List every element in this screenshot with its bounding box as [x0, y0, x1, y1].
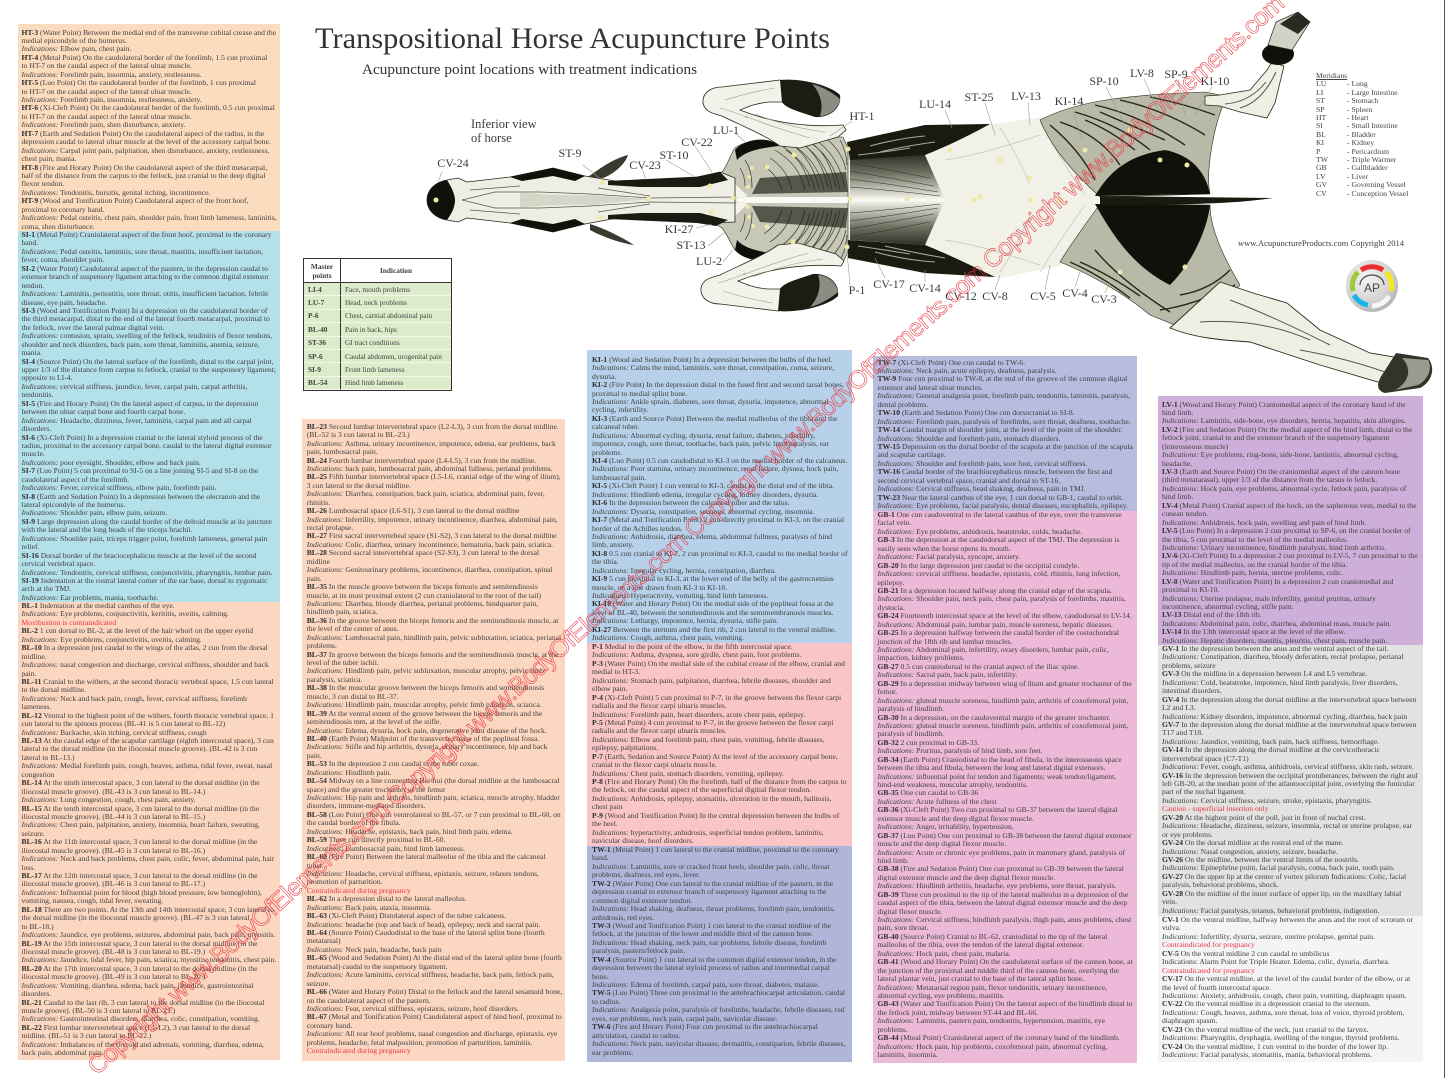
panel: bladder meridian BL part 1: BL-1 Indentation at the medial canthus of the eye. Indications: Eye problems, conjunctivitis, kerititis, uveitis, calming. Moxibustion is contraindicated BL-2 1 cun dorsal to BL-2, at the level of the hair whorl on the upper eyelid Indications: Eye problems, conjunctivitis, uveitis, calming. BL-10 In a depression just caudal to the wings of the atlas, 2 cun from the dorsal midline. Indications: nasal congestion and discharge, cervical stiffness, shoulder and back pain. BL-11 Cranial to the withers, at the second thoracic vertebral space, 1.5 cun lateral to the dorsal midline. Indications: Neck and back pain, cough, fever, cervical stiffness, forelimb lameness. BL-12 Ventral to the highest point of the withers, fourth thoracic vertebral space, 1 cun lateral to the spinous process (BL-41 is 5 cun lateral to BL-12) Indications: Backache, skin itching, cervical stiffness, cough BL-13 At the caudal edge of the scapular cartilage (eighth intercostal space), 3 cun lateral to the dorsal midline (in the iliocostal muscle groove). (BL-42 is 3 cun lateral to BL-13.) Indications: Medial forelimb pain, cough, heaves, asthma, tidal fever, sweat, nasal congestion BL-14 At the ninth intercostal space, 3 cun lateral to the dorsal midline (in the iliocostal muscle groove). (BL-43 is 3 cun lateral to BL-14.) Indications: Lung congestion, cough, chest pain, anxiety. BL-15 At the tenth intercostal space, 3 cun lateral to the dorsal midline (in the iliocostal muscle groove). (BL-44 is 3 cun lateral to BL-15.) Indications: Chest pain, palpitation, anxiety, insomnia, heart failure, sweating, seizure. BL-16 At the 11th intercostal space, 3 cun lateral to the dorsal midline (in the iliocostal muscle groove). (BL-45 is 3 cun lateral to BL-16.) Indications: Neck and back problems, chest pain, colic, fever, abdominal pain, hair loss. BL-17 At the 12th intercostal space, 3 cun lateral to the dorsal midline (in the iliocostal muscle groove). (BL-46 is 3 cun lateral to BL-17.) Indications: Influential point for blood (high blood pressure, low hemoglobin), vomiting, nausea, cough, tidal fever, sweating. BL-18 There are two points. At the 13th and 14th intercostal space, 3 cun lateral to the dorsal midline (in the iliocostal muscle groove). (BL-47 is 3 cun lateral to BL-18.) Indications: Jaundice, eye problems, seizures, abdominal pain, back pain, myositis. BL-19 At the 15th intercostal space, 3 cun lateral to the dorsal midline (in the iliocostal muscle groove). (BL-48 is 3 cun lateral to BL-19.) Indications: Jaundice, tidal fever, hip pain, sciatica, myositis, tendonitis, chest pain. BL-20 At the 17th intercostal space, 3 cun lateral to the dorsal midline (in the iliocostal muscle groove). (BL-49 is 3 cun lateral to BL-20.) Indications: Vomiting, diarrhea, edema, back pain, jaundice, gastrointestinal disorders. BL-21 Caudal to the last rib, 3 cun lateral to the dorsal midline (in the iliocostal muscle groove). (BL-50 is 3 cun lateral to BL-21.) Indications: Gastrointestinal disorders, diarrhea, colic, constipation, vomiting. BL-22 First lumbar intervertebral space (L1-L2), 3 cun lateral to the dorsal midline. (BL-51 is 3 cun lateral to BL-22.) Indications: Imbalances of the thyroid and adrenals, vomiting, diarrhea, edema, back pain, abdominal pain.: [22, 601, 276, 1057]
table: master points: Face, mouth problems: [345, 285, 410, 294]
panel: bladder meridian BL part 2: BL-23 Second lumbar intervertebral space (L2-L3), 3 cun from the dorsal midline. (BL-52 is 3 cun lateral to BL-23.) Indications: Asthma, urinary incontinence, impotence, edema, ear problems, back pain, lumbosacral pain. BL-24 Fourth lumbar intervertebral space (L4-L5), 3 cun from the midline. Indications: back pain, lumbosacral pain, abdominal fullness, perianal problems. BL-25 Fifth lumbar intervertebral space (L5-L6, cranial edge of the wing of ilium), 3 cun lateral to the dorsal midline. Indications: Diarrhea, constipation, back pain, sciatica, abdominal pain, fever, rhinitis. BL-26 Lumbosacral space (L6-S1), 3 cun lateral to the dorsal midline Indications: Infertility, impotence, urinary incontinence, diarrhea, abdominal pain, rectal prolapse. BL-27 First sacral intervertebeal space (S1-S2), 3 cun lateral to the dorsal midline Indications: Colic, diarrhea, urinary incontinence, hematuria, back pain, sciatica. BL-28 Second sacral intervertebral space (S2-S3), 3 cun lateral to the dorsal midline Indications: Genitourinary problems, incontinence, diarrhea, constipation, spinal pain. BL-35 In the muscle groove between the biceps femoris and semitendinosis muscle, at its most proximal extent (2 cun craniolateral to the root of the tail) Indications: Diarrhea, bloody diarrhea, perianal problems, hindquarter pain, hindlimb pain, sciatica. BL-36 In the groove between the biceps femoris and the semitendinosis muscle, at the level of the center of anus. Indications: Lumbosacral pain, hindlimb pain, pelvic subluxation, sciatica, perianal problems. BL-37 In groove between the biceps femoris and the semitendinosis muscle, at the level of the tuber ischii. Indications: Hindlimb pain, pelvic subluxation, muscular atrophy, pelvic limb paralysis, sciatica. BL-38 In the muscular groove between the biceps femoris and semitendinosis muscle, 3 cun distal to BL-37. Indications: Hindlimb pain, muscular atrophy, pelvic limb paralysis, sciatica. BL-39 At the ventral extent of the groove between the biceps femoris and the semitendinosis mm, at the level of the stifle. Indications: Edema, dysuria, hock pain, degenerative joint disease of the hock. BL-40 (Earth Point) Midpoint of the transverse crease of the popliteal fossa. Indications: Stifle and hip arthritis, dysuria, urinary incontinence, hip and back pain. BL-53 In the depression 2 cun caudal to the tuber coxae. Indications: Hindlimb pain. BL-54 Midway on a line connecting Bai-hui (the dorsal midline at the lumbosacral space) and the greater trochanter of the femur Indications: Hip pain and arthritis, hindlimb pain, sciatica, muscle atrophy, bladder disorders, immune-mediated disorders. BL-58 (Luo Point) One cun ventrolateral to BL-57, or 7 cun proximal to BL-60, on the caudal border of the fibula. Indications: Headache, epistaxis, back pain, hind limb pain, edema. BL-59 Three cun directly proximal to BL-60. Indications: Lumbosacral pain, hind limb lameness. BL-60 (Fire Point) Between the lateral malleolus of the tibia and the calcaneal tuber. Indications: Headache, cervical stiffness, epistaxis, seizure, relaxes tendons, promotion of parturition. Contraindicated during pregnancy BL-62 In a depression distal to the lateral malleolus. Indications: Back pain, ataxia, insomnia. BL-63 (Xi-Cleft Point) Distolateral aspect of the tuber calcaneus. Indications: headache (top and back of head), epilepsy, neck and sacral pain. BL-64 (Source Point) Caudodistal to the base of the lateral splint bone (fourth metatarsal) Indications: Neck pain, headache, back pain BL-65 (Wood and Sedation Point) At the distal end of the lateral splint bone (fourth metatarsal) caudal to the suspensory ligament. Indications: Acute laminitis, cervical stiffness, headache, back pain, fetlock pain, seizure. BL-66 (Water and Horary Point) Distal to the fetlock and the lateral sesamoid bone, on the caudolateral aspect of the pastern. Indications: Fear, cervical stiffness, epistaxis, seizure, hoof disorders. BL-67 (Metal and Tonific: [307, 422, 562, 1055]
point labels: LU-1: [713, 123, 739, 137]
icon: logo: AP: [1364, 281, 1380, 295]
point labels: [437, 66, 1229, 306]
table: master points: ST-36: [308, 338, 326, 347]
legend: meridians: ST: [1316, 96, 1325, 105]
icon: head and neck: [427, 155, 735, 245]
panel: conception vessel CV: CV-1 On the ventral midline, halfway between the anus and the root of scrotum or vulva. Indications: Infertility, dysuria, seizure, uterine prolapse, genital pain. Contraindicated for pregnancy CV-5 On the ventral midline 2 cun caudal to umbilicus Indications: Alarm Point for Triple Heater. Edema, colic, dysuria, diarrhea. Contraindicated for pregnancy CV-17 On the ventral midline, at the level of the caudal border of the elbow, or at the level of fourth intercostal space. Indications: Anxiety, anhidrosis, cough, chest pain, vomiting, diaphragm spasm. CV-22 On the ventral midline in a depression cranial to the sternum. Indications: Cough, heaves, asthma, sore throat, loss of voice, thyroid problem, diaphragm spasm. CV-23 On the ventral midline of the neck, just cranial to the larynx. Indications: Pharyngitis, dysphagia, swelling of the tongue, thyroid problems. CV-24 On the ventral midline, 1 cun ventral to the border of the lower lip. Indications: Facial paralysis, stomatitis, mania, behavioral problems.: [1162, 915, 1413, 1059]
icon: hind limb upper: [1040, 12, 1310, 197]
point labels: ST-9: [559, 146, 581, 160]
panel: triple warmer meridian TW part 1: TW-1 (Metal Point) 1 cun lateral to the cranial midline, proximal to the coronary band. Indications: Laminitis, sore or cracked front heels, shoulder pain, colic, throat problems, deafness, red eyes, fever. TW-2 (Water Point) One cun lateral to the cranial midline of the pastern, in the depression cranial to extensor branch of suspensory ligament attaching to the common digital extensor tendon. Indications: Head shaking, deafness, throat problems, forelimb pain, tendonitis, anhidrosis, red eyes. TW-3 (Wood and Tonification Point) 1 cun lateral to the cranial midline of the fetlock, at the junction of the lower and middle third of the cannon bone. Indications: Head shaking, neck pain, ear problems, febrile disease, forelimb paralysis, pastern/fetlock pain. TW-4 (Source Point) 1 cun lateral to the common digital extensor tendon, in the depression between the lateral styloid process of radius and intermedial carpal bone. Indications: Edema of forelimb, carpal pain, sore throat, diabetes, malaise. TW-5 (Luo Point) Three cun proximal to the antebrachiocarpal articulation, caudal to radius. Indications: Analgesia point, paralysis of forelimbs, headache, febrile diseases, red eyes, ear problems, neck pain, carpal pain, navicular disease. TW-6 (Fire and Horary Point) Four cun proximal to the antebrachiocarpal articulation, caudal to radius. Indications: Neck pain, navicular disease, dermatitis, constipation, febrile diseases, ear problems.: [592, 845, 845, 1056]
table: master points: Caudal abdomen, urogenital pain: [345, 352, 442, 361]
point labels: CV-24: [437, 156, 469, 170]
table: master points: [304, 259, 451, 390]
leader lines: [438, 79, 1212, 293]
point labels: CV-3: [1091, 292, 1117, 306]
panel: triple warmer meridian TW part 2: TW-7 (Xi-Cleft Point) One cun caudal to TW-6. Indications: Neck pain, acute epilepsy, deafness, paralysis. TW-9 Four cun proximal to TW-8, at the end of the groove of the common digital extensor and lateral ulnar muscles. Indications: General analgesia point, forelimb pain, tendonitis, laminitis, paralysis, dental problems. TW-10 (Earth and Sedation Point) One cun dorsocranial to SI-8. Indications: Forelimb pain, paralysis of forelimbs, sore throat, deafness, toothache. TW-14 Caudal margin of shoulder joint, at the level of the point of the shoulder. Indications: Shoulder and forelimb pain, stomach disorders. TW-15 Depression on the dorsal border of the scapula at the junction of the scapula and scapular cartilage. Indications: Shoulder and forelimb pain, sore foot, cervical stiffness. TW-16 Caudal border of the brachiocephalicus muscle, between the first and second cervical vertebral space, cranial and dorsal to ST-16. Indications: Cervical stiffness, head shaking, deafness, pain in TMJ. TW-23 Near the lateral canthus of the eye, 1 cun dorsal to GB-1, caudal to orbit. Indications: Eye problems, facial paralysis, dental diseases, encephalitis, epilepsy.: [878, 358, 1133, 510]
panel: gallbladder meridian GB: GB-1 One cun caudoventral to the lateral canthus of the eye, over the transverse facial vein. Indications: Eye problems, anhidrosis, heatstroke, colds, headache. GB-3 In the depression at the caudodorsal aspect of the TMJ. The depression is easily seen when the horse opens its mouth. Indications: Facial paralysis, syncope, anxiety. GB-20 In the large depression just caudal to the occipital condyle. Indications: cervical stiffness, headache, epistaxis, cold, rhinitis, lung infection, epilepsy. GB-21 In a depression located halfway along the cranial edge of the scapula. Indications: Shoulder pain, neck pain, chest pain, paralysis of forelimbs, mastitis, dystocia. GB-24 Fourteenth intercostal space at the level of the elbow, caudodorsal to LV-14. Indications: Abdominal pain, lumbar pain, muscle soreness, hepatic diseases. GB-25 In a depression halfway between the caudal border of the costochondral junction of the 18th rib and lumbar muscles. Indications: Abdominal pain, infertility, ovary disorders, lumbar pain, colic, impaction, kidney problems. GB-27 0.5 cun craniodorsal to the cranial aspect of the iliac spine. Indications: Sacral pain, back pain, infertility. GB-29 In a depression midway between wing of ilium and greater trochanter of the femur. Indications: gluteal muscle soreness, hindlimb pain, arthritis of coxofemoral joint, paralysis of hindlimb. GB-30 In a depression, on the caudoventral margin of the greater trochanter. Indications: gluteal muscle soreness, hindlimb pain, arthritis of coxofemoral joint, paralysis of hindlimb. GB-32 2 cun proximal to GB-33. Indications: Pruritus, paralysis of hind limb, sore feet. GB-34 (Earth Point) Craniodistal to the head of fibula, in the interosseous space between the tibia and fibula, between the long and lateral digital extensors. Indications: influential point for tendon and ligaments; weak tendon/ligament, hind-end weakness, muscular atrophy, tendonitis. GB-35 One cun caudal to GB-36 Indications: Acute fullness of the chest GB-36 (Xi-Cleft Point) Two cun proximal to GB-37 between the lateral digital extensor muscle and the deep digital flexor muscle. Indications: Anger, irritability, hypertension. GB-37 (Luo Point) One cun proximal to GB-38 between the lateral digital extensor muscle and the deep digital flexor muscle. Indications: Acute or chronic eye problems, pain in mammary gland, paralysis of hind limb. GB-38 (Fire and Sedation Point) One cun proximal to GB-39 between the lateral digital extensor muscle and the deep digital flexor muscle. Indications: Hindlimb arthritis, headache, eye problems, sore throat, paralysis. GB-39 Three cun proximal to the tip of the lateral malleolus in a depression of the caudal aspect of the tibia, between the lateral digital extensor muscle and the deep digital flexor muscle. Indications: Cervical stiffness, hindlimb paralysis, thigh pain, anus problems, chest pain, sore throat. GB-40 (Source Point) Cranial to BL-62, craniodistal to the tip of the lateral malleolus of the tibia, over the tendon of the lateral digital extensor. Indications: Hock pain, chest pain, malaria. GB-41 (Wood and Horary Point) On the caudolateral surface of the cannon bone, at the junction of the proximal and middle third of the cannon bone, overlying the lateral plantar vein, just cranial to the base of the lateral splint bone. Indications: Metatarsal region pain, flexor tendonitis, urinary incontinence, abnormal cycling, eye problems, mastitis. GB-43 (Water and Tonification Point) On the lateral aspect of the hindlimb distal to the fetlock joint, midway between ST-44 and BL-66. Indications: Laminitis, pastern pain, tendonitis, hypertension, mastitis, eye problems. GB-44 (Mteal Point) Craniolateral aspect of the coronary band of the hindlimb. Indications: Hock pain, hip problems, coxofemoral pain, abnormal cycling, laminitis, insomnia.: [878, 510, 1133, 1059]
table: master points: SI-9: [308, 365, 321, 374]
view caption: Inferior view: [471, 117, 537, 131]
acupuncture points: [434, 128, 1190, 274]
icon: tail: [1100, 196, 1273, 205]
point labels: P-1: [849, 283, 865, 297]
table: master points: Master: [311, 262, 333, 270]
point labels: CV-5: [1030, 289, 1056, 303]
point labels: CV-23: [629, 158, 661, 172]
point labels: KI-10: [1201, 74, 1229, 88]
table: master points: points: [312, 270, 332, 280]
point labels: CV-22: [681, 135, 713, 149]
table: master points: Pain in back, hips: [345, 325, 397, 334]
legend: meridians: LI: [1316, 88, 1323, 97]
table: master points: GI tract conditions: [345, 338, 400, 347]
watermark: Copyright www.BodyOfElements.com Copyright www.BodyOfElements.com Copyright www.BodyOfElements.com Copyright www.BodyOfElements.com: [82, 0, 1290, 1078]
point labels: CV-8: [982, 289, 1008, 303]
point labels: SP-10: [1089, 74, 1119, 88]
point labels: ST-25: [965, 90, 993, 104]
icon: trunk of horse: [847, 115, 1100, 278]
point labels: CV-4: [1062, 286, 1088, 300]
legend: meridians: HT: [1316, 113, 1326, 122]
legend: meridians: CV: [1316, 189, 1327, 198]
table: master points: Chest, carnial abdominal pain: [345, 311, 432, 320]
table: master points: Front limb lameness: [345, 365, 405, 374]
panel: pericardium meridian P: P-1 Medial to the point of the elbow, in the fifth intercostal space. Indications: Asthma, dyspnea, sore girdle, chest pain, foot problems. P-3 (Water Point) On the medial side of the cubital crease of the elbow, cranial and medial to HT-3. Indications: Stomach pain, palpitation, diarrhea, febrile diseases, shoulder and elbow pain. P-4 (Xi-Cleft Point) 5 cun proximal to P-7, in the groove between the flexor carpi radialis and the flexor carpi ulnaris muscles. Indications: Forelimb pain, heart disorders, acute chest pain, epilepsy. P-5 (Metal Point) 4 cun proximal to P-7, in the groove between the flexor carpi radialis and the flexor carpi ulnaris muscles. Indications: Elbow and forelimb pain, chest pain, vomiting, febrile diseases, epilepsy, palpitations. P-7 (Earth, Sedation and Source Point) At the level of the accessory carpal bone, cranial to the flexor carpi ulnaris muscle. Indications: Chest pain, stomach disorders, vomiting, epilepsy. P-8 (Fire and Horary Point) On the forelimb, half of the distance from the carpus to the fetlock, on the caudal aspect of the superficial digitial flexor tendon. Indications: Anhidrosis, epilepsy, stomatitis, ulceration in the mouth, halitosis, chest pain P-9 (Wood and Tonification Point) In the central depression between the bulbs of the heel. Indications: hyperactivity, anhidrosis, superficial tendon problem, laminitis, navicular disease, hoof disorders.: [592, 642, 846, 845]
legend: meridians: Meridians - Lung - Large Intestine - Stomach - Spleen - Heart - Small Intestine - Bladder - Kidney - Pericardium - Triple Warmer - Gallbladder - Liver - Governing Vessel - Conception Vessel: [1316, 71, 1408, 198]
point labels: KI-27: [665, 222, 693, 236]
point labels: LV-13: [1011, 89, 1041, 103]
legend: meridians: GB: [1316, 163, 1327, 172]
icon: foreleg lower: [701, 243, 844, 311]
point labels: HT-1: [850, 109, 874, 123]
subtitle: Acupuncture point locations with treatment indications: [362, 62, 697, 78]
point labels: LU-2: [696, 254, 722, 268]
icon: chest: [712, 137, 848, 262]
legend: meridians: BL: [1316, 130, 1326, 139]
legend: meridians: P: [1316, 147, 1320, 156]
point labels: LV-8: [1130, 66, 1154, 80]
legend: meridians: LV: [1316, 172, 1326, 181]
point labels: KI-14: [1055, 94, 1083, 108]
point labels: CV-17: [873, 277, 905, 291]
point labels: CV-14: [909, 281, 941, 295]
point labels: CV-12: [945, 289, 977, 303]
icon: hind limb lower: [1060, 204, 1432, 393]
legend: meridians: TW: [1316, 155, 1328, 164]
table: master points: Hind limb lameness: [345, 378, 403, 387]
table: master points: BL-40: [308, 325, 327, 334]
legend: meridians: SI: [1316, 121, 1323, 130]
point labels: SP-9: [1164, 67, 1188, 81]
icon: foreleg upper: [703, 80, 846, 148]
point labels: ST-10: [660, 148, 688, 162]
panel: governing vessel GV: GV-1 In the depression between the anus and the ventral aspect of the tail. Indications: Constipation, diarrhea, bloody defecation, rectal prolapse, perianal problems, seizure GV-3 On the midline in a depression between L4 and L5 vertebrae. Indications: Cold, heatstroke, impotence, hind limb paralysis, liver disorders, intestinal disorders. GV-4 In the depression along the dorsal midline at the intervertebral space between L2 and L3. Indications: Kidney disorders, impotence, abnormal cycling, diarrhea, back pain GV-7 In the depression along the dorsal midline at the intervertebral space between T17 and T18. Indications: Jaundice, vomiting, back pain, back stiffness, hemorrhage. GV-14 In the depression along the dorsal midline at the cervicothoracic intervertebral space (C7-T1) Indications: Fever, cough, asthma, anhidrosis, cervical stiffness, skin rash, seizure. GV-16 In the depression between the occipital protuberances, between the right and left GB-20, at the median point of the atlantooccipital joint, overlying the funicular part of the nuchal ligament. Indications: Cervical stiffness, seizure, stroke, epistaxis, pharyngitis. Caution - superficial insertion only GV-20 At the highest point of the poll, just in front of nuchal crest. Indications: Headache, dizziness, seizure, insomnia, rectal or uterine prolapse, ear or eye problems. GV-24 On the dorsal midline at the rostral end of the mane. Indications: Nasal congestion, anxiety, seizure, headache. GV-26 On the midline, between the ventral limits of the nostrils. Indications: Epinephrine point, facial paralysis, coma, back pain, tooth pain. GV-27 On the upper lip at the center of vortex pilorum Indications: Colic, facial paralysis, behavioral problems, shock. GV-28 On the midline of the inner surface of upper lip, on the maxillary labial vein. Indications: Facial paralysis, tetanus, behavioral problems, indigestion.: [1162, 644, 1418, 915]
table: master points: Head, neck problems: [345, 298, 407, 307]
table: master points: P-6: [308, 311, 319, 320]
table: master points: Indication: [380, 266, 412, 275]
table: master points: LI-4: [308, 285, 322, 294]
point labels: ST-13: [677, 238, 705, 252]
table: master points: BL-54: [308, 378, 327, 387]
title: Transpositional Horse Acupuncture Points: [315, 22, 830, 55]
legend: meridians: GV: [1316, 180, 1327, 189]
panel: small intestine meridian SI: SI-1 (Metal Point) Craniolateral aspect of the front hoof, proximal to the coronary band. Indications: Pedal osteitis, laminitis, sore throat, mastitis, insufficient lactation, fever, coma, shoulder pain. SI-2 (Water Point) Caudolateral aspect of the pastern, in the depression caudal to extensor branch of suspensory ligament attaching to the common digital extensor tendon. Indications: Laminitis, periostitis, sore throat, otitis, insufficient lactation, febrile disease, eye pain, headache. SI-3 (Wood and Tonification Point) In a depression on the caudolateral border of the third metacarpal, distal to the end of the lateral fourth metacarpal, proximal to the fetlock, over the lateral palmar digital vein. Indications: contusion, sprain, swelling of the fetlock, tendinitis of flexor tendons, shoulder and neck disorders, back pain, sore throat, laminitis, anemia, seizure, mania. SI-4 (Source Point) On the lateral surface of the forelimb, distal to the carpal joint, upper 1/3 of the distance from carpus to fetlock, cranial to the suspensory ligament; opposite to LI-4. Indications: cervical stiffness, jaundice, fever, carpal pain, carpal arthritis, tendonitis. SI-5 (Fire and Horary Point) On the lateral aspect of carpus, in the depression between the ulnar carpal bone and fourth carpal bone. Indications: Headache, dizziness, fever, laminitis, carpal pain and all carpal disorders. SI-6 (Xi-Cleft Point) In a depression cranial to the lateral styloid process of the radius, proximal to the accessory carpal bone, caudal to the lateral digital extensor muscle. Indications: poor eyesight, Shoulder, elbow and back pain. SI-7 (Luo Point) 5 cun proximal to SI-5 on a line joining SI-5 and SI-8 on the caudolateral aspect of the forelimb. Indications: Fever, cervical stiffness, elbow pain, forelimb pain. SI-8 (Earth and Sedation Point) In a depression between the olecranon and the lateral epicondyle of the humerus. Indications: Shoulder pain, elbow pain, seizure. SI-9 Large depression along the caudal border of the deltoid muscle at its juncture with the lateral and the long heads of the triceps brachii. Indications: Shoulder pain, triceps trigger point, forelimb lameness, general pain relief. SI-16 Dorsal border of the braciocephalicus muscle at the level of the second cervical vertebral space. Indications: Tendonitis, cervical stiffness, conjunctivitis, pharyngitis, lumbar pain. SI-19 Indentation at the rostral lateral corner of the ear base, dorsal to zygomatic arch at the TMJ. Indications: Ear problems, mania, toothache.: [22, 230, 276, 602]
legend: meridians: SP: [1316, 105, 1325, 114]
icon: logo: [1346, 260, 1398, 312]
panel: liver meridian LV: LV-1 (Wood and Horary Point) Craniomedial aspect of the coronary band of the hind limb. Indications: Laminitis, side-bone, eye disorders, hernia, hepatitis, skin allergies. LV-2 (Fire and Sedation Point) On the medial aspect of the hind limb, distal to the fetlock joint, cranial to and the extensor branch of the suspensory ligament (interosseous muscle) Indications: Eye problems, ring-bone, side-bone, laminitis, abnormal cycling, headache. LV-3 (Earth and Source Point) On the craniomedial aspect of the cannon bone (third metatarasal), upper 1/3 of the distance from the tarsus to fetlock. Indications: Hock pain, eye problems, abnormal cycle, fetlock pain, paralysis of hind limb. LV-4 (Metal Point) Cranial aspect of the hock, on the saphenous vein, medial to the cunean tendon. Indications: Anhidrosis, hock pain, swelling and pain of hind limb. LV-5 (Luo Point) In a depression 2 cun proximal to SP-6, on the cranial border of the tibia, 5 cun proximal to the level of the medial malleolus. Indications: Urinary incontinence, hindlimb paralysis, hind limb arthritis. LV-6 (Xi-Cleft Point) In a depression 2 cun proximal to LV-5, 7 cun proximal to the tip of the medial malleolus, on the cranial border of the tibia. Indications: Hindlimb pain, hernia, uterine problems, colic. LV-8 (Water and Tonification Point) In a depression 2 cun craniomedial and proximal to KI-10. Indications: Uterine prolapse, male infertility, genital pruritus, urinary incontinence, abnormal cycling, stifle pain. LV-13 Distal end of the 18th rib. Indications: Abdominal pain, colic, diarrhea, abdominal mass, muscle pain. LV-14 In the 13th intercostal space at the level of the elbow. Indications: Hepatic disorders, mastitis, pleuritis, chest pain, muscle pain.: [1162, 400, 1418, 645]
panel: heart meridian HT: HT-3 (Water Point) Between the medial end of the transverse cubital crease and the medial epicondyle of the humerus. Indications: Elbow pain, chest pain. HT-4 (Metal Point) On the caudolateral border of the forelimb, 1.5 cun proximal to HT-7 on the caudal aspect of the lateral ulnar muscle. Indications: Forelimb pain, insomnia, anxiety, restlessness. HT-5 (Luo Point) On the caudolateral border of the forelimb, 1 cun proximal to HT-7 on the caudal aspect of the lateral ulnar muscle. Indications: Forelimb pain, insomnia, restlessness, anxiety. HT-6 (Xi-Cleft Point) On the caudolateral border of the forelimb, 0.5 cun proximal to HT-7 on the caudal aspect of the lateral ulnar muscle. Indications: Forelimb pain, shen disturbance, anxiety. HT-7 (Earth and Sedation Point) On the caudolateral aspect of the radius, in the depression caudal to lateral ulnar muscle at the level of the accessory carpal bone. Indications: Carpal joint pain, palpitation, shen disturbance, anxiety, restlessness, chest pain, mania. HT-8 (Fire and Horary Point) On the caudolateral aspect of the third metacarpal, half of the distance from the carpus to the fetlock, just cranial to the deep digital flexor tendon. Indications: Tendonitis, bursitis, genital itching, incontinence. HT-9 (Wood and Tonification Point) Caudolateral aspect of the front hoof, proximal to coronary band. Indications: Pedal osteitis, chest pain, shoulder pain, front limb lameness, laminitis, coma, shen disturbance.: [22, 28, 277, 231]
table: master points: LU-7: [308, 298, 324, 307]
panel: kidney meridian KI: KI-1 (Wood and Sedation Point) In a depression between the bulbs of the heel. Indications: Calms the mind, laminitis, sore throat, constipation, coma, seizure, dysuria. KI-2 (Fire Point) In the depression distal to the fused first and second tarsal bones, proximal to medial splint bone. Indications: Ankle sprain, diabetes, sore throat, dysuria, impotence, abnormal cycling, infertility. KI-3 (Earth and Source Point) Between the medial malleolus of the tibia and the calcaneal tuber. Indications: Abnormal cycling, dysuria, renal failure, diabetes, infertility, impotence, cough, sore throat, toothache, back pain, pelvic limb paralysis, ear problems. KI-4 (Luo Point) 0.5 cun caudodistal to KI-3 on the medial border of the calcaneus. Indications: Poor stamina, urinary incontinence, renal failure, dysnea, hock pain, lumbosacral pain. KI-5 (Xi-Cleft Point) 1 cun ventral to KI-3, caudal to the distal end of the tibia. Indications: Hindlimb edema, irregular cycling, kidney disorders, dysuria. KI-6 In the depression between the calcaneal tuber and the talus. Indications: Dysuria, constipation, seizures, abnormal cycling, insomnia. KI-7 (Metal and Tonification Point) 2 cun directly proximal to KI-3, on the cranial border of the Achilles tendon. Indications: Anhidrosis, diarrhea, edema, abdominal fullness, paralysis of hind limb, anxiety. KI-8 0.5 cun cranial to KI-7, 2 cun proximal to KI-3, caudal to the medial border of the tibia. Indications: Irregular cycling, hernia, constipation, diarrhea. KI-9 5 cun proximal to KI-3, at the lower end of the belly of the gastrocnemius muscle, on a line drawn from KI-3 to KI-10. Indications: Hyperactivity, vomiting, hind limb lameness. KI-10 (Water and Horary Point) On the medial side of the popliteal fossa at the level of BL-40, between the semitendinosis and the semimembranosis muscles. Indications: Lethargy, impotence, hernia, dysuria, stifle pain. KI-27 Between the sternum and the first rib, 2 cun lateral to the ventral midline. Indications: Cough, asthma, chest pain, vomiting.: [592, 355, 848, 642]
legend: meridians: KI: [1316, 138, 1324, 147]
website copyright: www.AcupunctureProducts.com Copyright 2014: [1238, 238, 1405, 248]
right edge rule: [1444, 0, 1445, 1078]
point labels: LU-14: [919, 97, 951, 111]
table: master points: SP-6: [308, 352, 323, 361]
legend: meridians: LU: [1316, 79, 1326, 88]
view caption: of horse: [471, 131, 512, 145]
